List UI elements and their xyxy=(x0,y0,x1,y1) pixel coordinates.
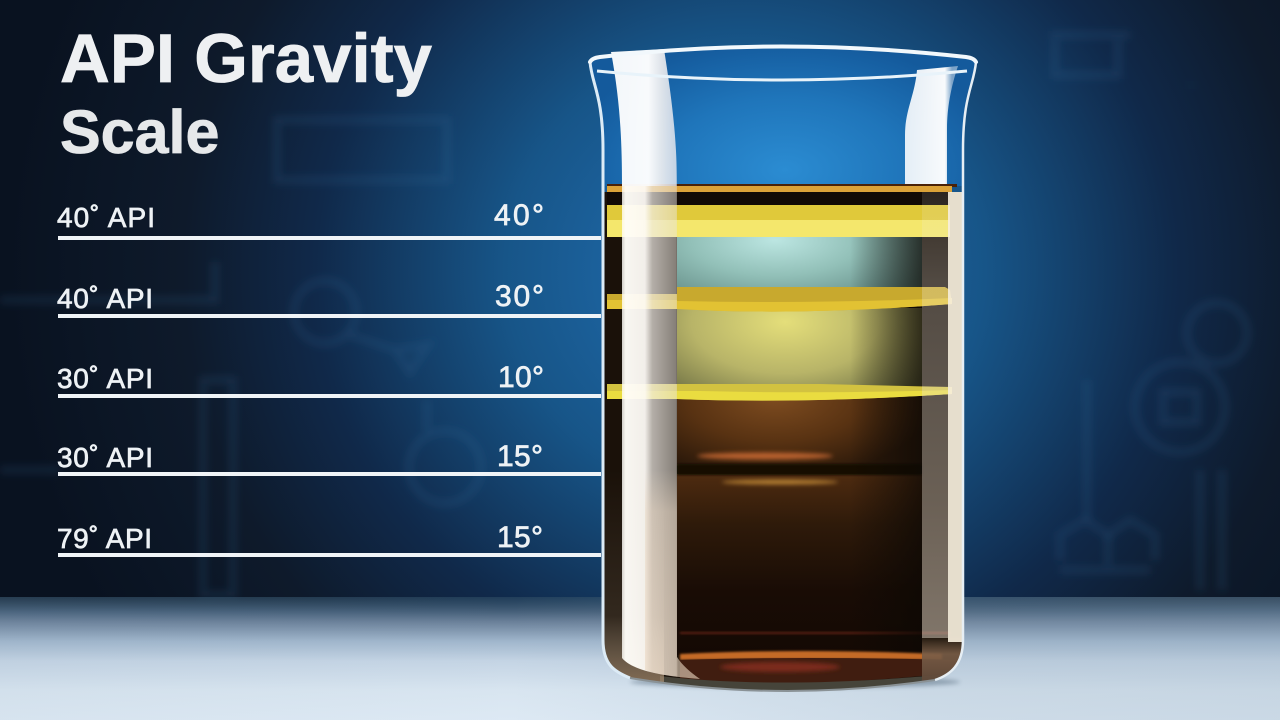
scale row 2: 30° xyxy=(495,280,544,313)
scale row 3: 30˚ API xyxy=(57,363,153,394)
scale row 4: 15° xyxy=(497,440,543,473)
scale row 5: 15° xyxy=(497,521,543,554)
glass right highlight, upper xyxy=(905,66,958,184)
oil column xyxy=(604,182,964,702)
dark interface xyxy=(677,464,922,475)
layer: yellow band one xyxy=(607,205,950,237)
scale row 4 xyxy=(57,440,601,476)
glass left highlight, upper xyxy=(611,49,677,186)
scale row 2 xyxy=(57,280,601,318)
glass left warm tint xyxy=(645,470,700,679)
layer: teal xyxy=(677,237,922,287)
glass base xyxy=(660,676,922,690)
title: Scale xyxy=(60,98,219,166)
scale row 2: 40˚ API xyxy=(57,283,153,314)
table surface xyxy=(0,597,1280,720)
glass left highlight, lower xyxy=(622,186,700,679)
scale row 1 xyxy=(57,199,601,240)
beaker rim, front xyxy=(597,71,967,80)
glass right grey strip xyxy=(922,192,948,638)
beaker rim, back xyxy=(590,46,976,62)
scale row 1: 40˚ API xyxy=(57,202,155,233)
glass right base corner xyxy=(922,638,962,681)
glass upper interior xyxy=(590,48,976,186)
layer: green yellow xyxy=(677,308,922,386)
layer: yellow band three xyxy=(607,384,952,401)
beaker shadow xyxy=(630,676,960,688)
scale row 3 xyxy=(57,361,601,398)
red glow xyxy=(697,452,833,460)
glass bottom edge xyxy=(630,678,935,691)
layer: deep oil xyxy=(677,474,922,562)
layer: base sediment xyxy=(680,658,922,682)
glass right cream strip xyxy=(948,192,963,642)
glass left strip xyxy=(604,518,664,682)
layer: brown upper xyxy=(677,396,922,466)
layer: surface film xyxy=(607,184,957,193)
layer: orange band xyxy=(680,651,942,660)
scale row 4: 30˚ API xyxy=(57,442,153,473)
scale row 5 xyxy=(57,521,601,557)
red sediment glow xyxy=(720,662,840,672)
layer: amber band two xyxy=(607,287,952,312)
glass right wall xyxy=(935,62,976,680)
thin red line xyxy=(680,632,950,634)
glass walls xyxy=(590,62,630,678)
faint laboratory line art xyxy=(0,35,1247,595)
scale row 3: 10° xyxy=(498,361,544,394)
scale row 5: 79˚ API xyxy=(57,523,152,554)
amber glow xyxy=(722,480,838,484)
inner column shading xyxy=(854,237,922,636)
dark oil base xyxy=(604,192,964,702)
title xyxy=(60,20,432,166)
panel: beaker xyxy=(590,46,976,702)
title: API Gravity xyxy=(60,20,432,97)
scale row 1: 40° xyxy=(494,199,544,232)
